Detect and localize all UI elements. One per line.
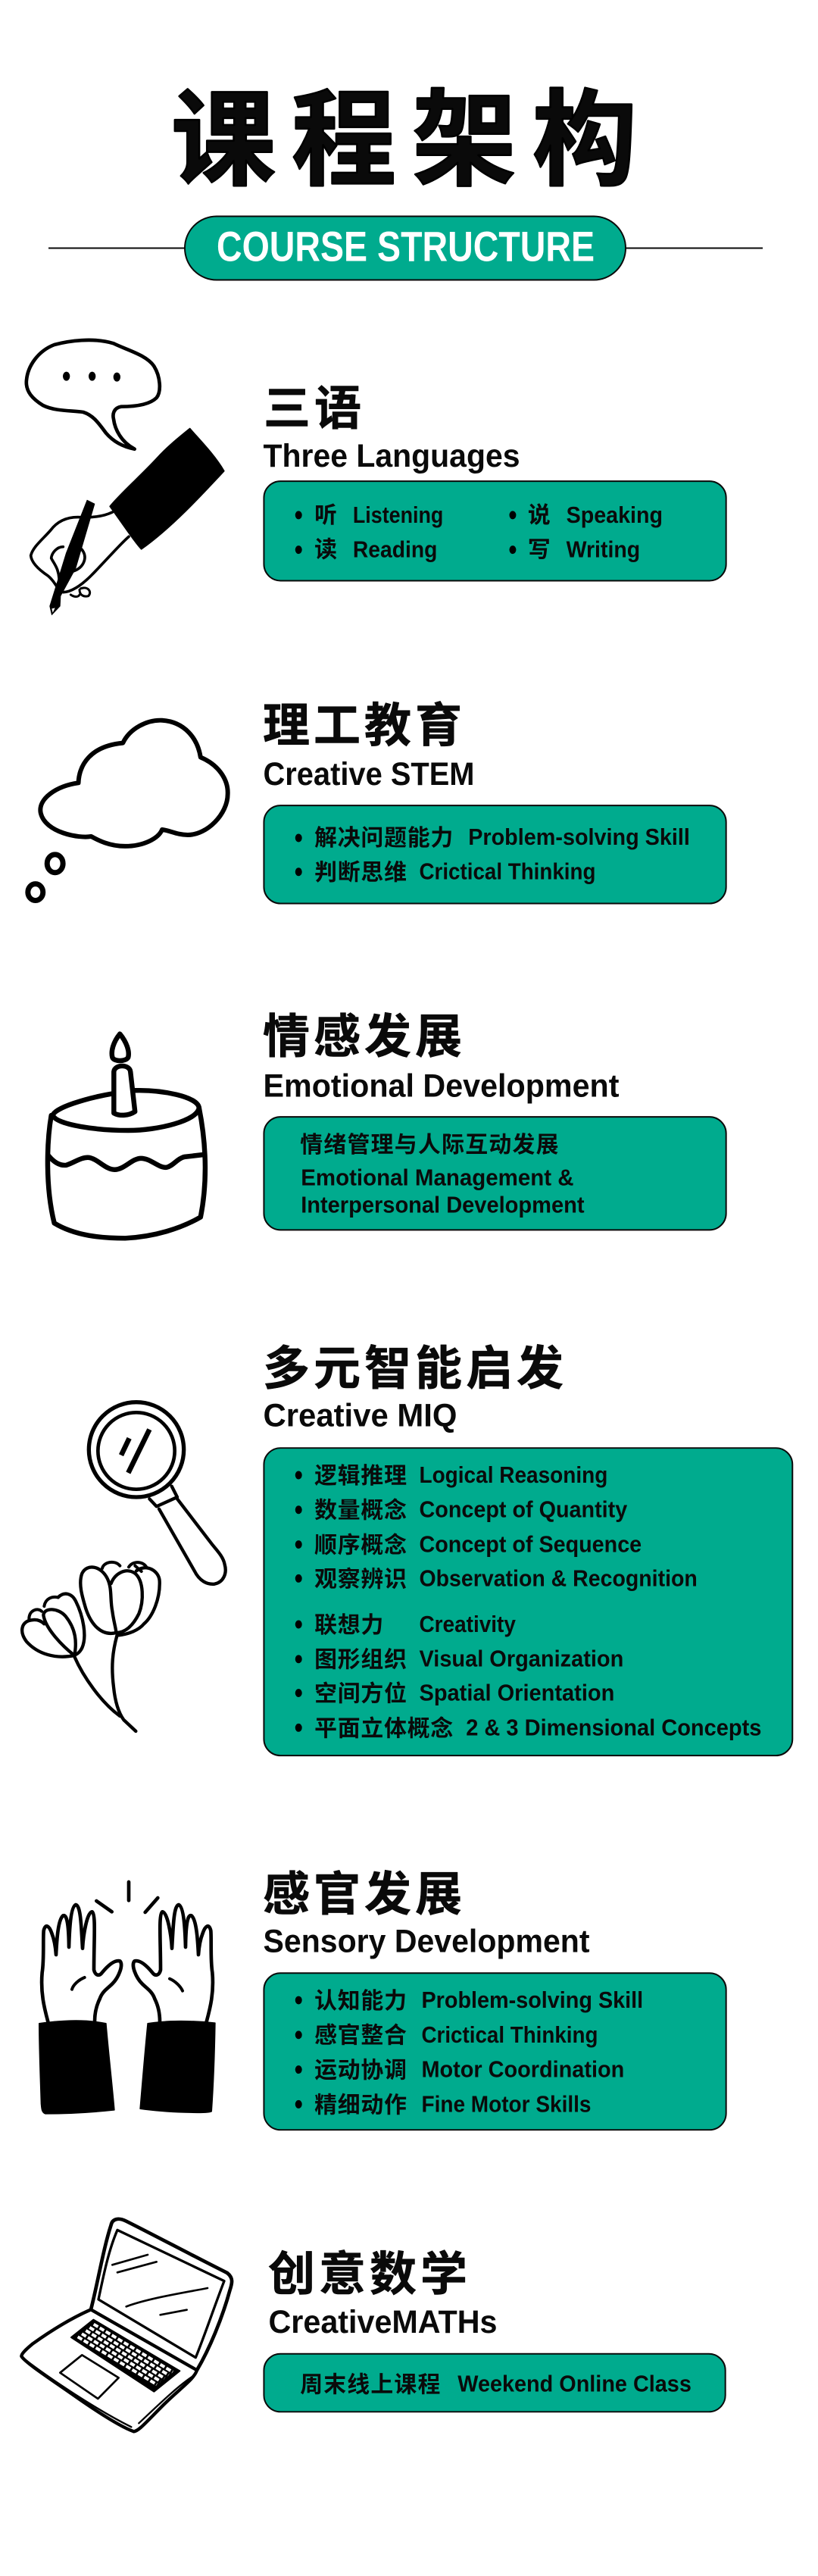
subheading: sensory development: Sensory Development (264, 1923, 589, 1959)
list item: quantity: Concept of Quantity (419, 1496, 627, 1523)
list item: reading (295, 536, 437, 563)
panel: MIQ skills (264, 1448, 792, 1755)
text: english description: Emotional Management & (301, 1165, 574, 1191)
icon: thought cloud (28, 721, 228, 901)
heading: 感官发展: 感官发展 (263, 1869, 466, 1921)
list item: sensory integration: Crictical Thinking (421, 2021, 598, 2048)
list item: critical thinking (295, 858, 595, 886)
section: creative STEM (28, 700, 726, 904)
list item: listening: 听 (314, 503, 337, 528)
subheading: creative MIQ: Creative MIQ (264, 1397, 457, 1433)
subheading: emotional development: Emotional Development (264, 1068, 620, 1104)
section: creative maths (21, 2219, 726, 2431)
heading: 三语: 三语 (264, 383, 365, 435)
subheading: creative STEM: Creative STEM (264, 756, 474, 792)
section: emotional development (48, 1011, 726, 1238)
list item: quantity: 数量概念 (314, 1498, 407, 1524)
text: class description (300, 2370, 692, 2397)
icon: laptop (21, 2219, 232, 2431)
text: english description: Interpersonal Development (301, 1191, 585, 1218)
list item: quantity (295, 1496, 627, 1524)
icon: tulips (22, 1562, 160, 1731)
panel: emotional management (264, 1117, 726, 1230)
list item: writing (509, 536, 640, 563)
list item: visual organization: Visual Organization (419, 1646, 623, 1672)
panel: languages list (264, 481, 726, 580)
list item: motor coordination (295, 2056, 624, 2084)
list item: creativity: 联想力 (314, 1613, 384, 1638)
list item: problem-solving (295, 824, 690, 851)
heading: 情感发展: 情感发展 (263, 1011, 466, 1064)
list item: speaking: 说 (528, 503, 551, 528)
title: 课程架构 (171, 83, 653, 199)
list item: cognition: 认知能力 (314, 1989, 407, 2014)
list item: logical reasoning: 逻辑推理 (314, 1464, 407, 1489)
text: english description (301, 1165, 585, 1218)
list item: critical thinking: 判断思维 (314, 861, 407, 886)
heading: 创意数学: 创意数学 (268, 2249, 471, 2301)
list item: observation: Observation & Recognition (419, 1565, 698, 1591)
list item: listening: Listening (353, 502, 443, 528)
list item: speaking (509, 502, 663, 528)
icon: birthday cake (48, 1034, 205, 1238)
list item: fine motor (295, 2090, 591, 2118)
section: creative MIQ (22, 1343, 792, 1755)
heading: 多元智能启发: 多元智能启发 (263, 1343, 567, 1396)
list item: visual organization: 图形组织 (314, 1648, 407, 1673)
list item: observation: 观察辨识 (314, 1567, 407, 1592)
list item: problem-solving: 解决问题能力 (314, 826, 454, 851)
subheading: creative maths: CreativeMATHs (268, 2304, 497, 2340)
list item: motor coordination: 运动协调 (314, 2059, 407, 2084)
list item: reading: Reading (353, 536, 437, 563)
icon: magnifying glass (89, 1402, 226, 1584)
list item: dimensional concepts: 平面立体概念 (314, 1715, 454, 1741)
section: three languages (27, 340, 726, 615)
list item: fine motor: 精细动作 (314, 2093, 407, 2118)
list item: dimensional concepts (295, 1714, 761, 1741)
list item: fine motor: Fine Motor Skills (421, 2090, 591, 2117)
list item: spatial orientation: 空间方位 (314, 1682, 407, 1707)
list item: visual organization (295, 1646, 623, 1673)
panel: STEM skills (264, 805, 726, 904)
list item: creativity: Creativity (419, 1611, 516, 1637)
list item: dimensional concepts: 2 & 3 Dimensional Concepts (466, 1714, 761, 1740)
section: sensory development (39, 1869, 726, 2130)
icon: speech bubble and writing hand (27, 340, 224, 615)
list item: spatial orientation (295, 1680, 614, 1707)
list item: critical thinking: Crictical Thinking (419, 858, 595, 885)
list item: sequence: Concept of Sequence (419, 1531, 642, 1557)
list item: sequence (295, 1531, 642, 1558)
list item: logical reasoning (295, 1462, 607, 1489)
text: class description: Weekend Online Class (457, 2370, 692, 2396)
text: class description: 周末线上课程 (300, 2372, 441, 2397)
list item: logical reasoning: Logical Reasoning (419, 1462, 607, 1488)
subtitle banner: course structure (48, 217, 763, 280)
list item: speaking: Speaking (567, 502, 663, 528)
list item: cognition (295, 1987, 643, 2014)
list item: observation (295, 1565, 698, 1592)
panel: sensory skills (264, 1973, 726, 2130)
list item: writing: 写 (528, 538, 551, 563)
list item: writing: Writing (567, 536, 640, 563)
list item: cognition: Problem-solving Skill (421, 1987, 643, 2013)
list item: reading: 读 (314, 538, 337, 563)
list item: sensory integration: 感官整合 (314, 2024, 407, 2049)
subheading: three languages: Three Languages (264, 438, 520, 474)
list item: sensory integration (295, 2021, 598, 2049)
list item: sequence: 顺序概念 (314, 1533, 407, 1558)
heading: 理工教育: 理工教育 (263, 700, 466, 752)
subtitle banner: course structure: COURSE STRUCTURE (217, 223, 595, 270)
list item: spatial orientation: Spatial Orientation (419, 1680, 614, 1706)
panel: weekend online class (264, 2354, 726, 2412)
list item: listening (295, 502, 443, 528)
text: chinese description: 情绪管理与人际互动发展 (300, 1133, 560, 1158)
list item: problem-solving: Problem-solving Skill (468, 824, 690, 850)
list item: motor coordination: Motor Coordination (421, 2056, 624, 2083)
list item: creativity (295, 1611, 516, 1638)
icon: raised hands (39, 1882, 215, 2114)
